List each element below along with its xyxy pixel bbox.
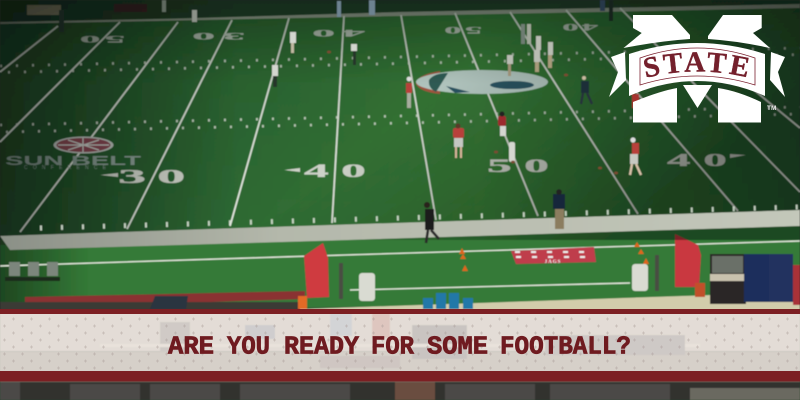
yard arrows bbox=[100, 154, 746, 177]
yard numbers, near side bbox=[118, 150, 740, 188]
red wall bbox=[25, 291, 305, 308]
banner bottom stripe bbox=[0, 371, 800, 382]
midfield eagle logo bbox=[416, 70, 548, 94]
banner headline bbox=[168, 332, 631, 362]
number 50: 50 bbox=[487, 156, 561, 177]
concrete walkway bbox=[300, 292, 800, 312]
Sun Belt logo bbox=[5, 136, 141, 171]
coach walking on sideline bbox=[424, 202, 439, 243]
lower field lines bbox=[0, 241, 800, 290]
Sun Belt logo: SUN BELT bbox=[5, 153, 141, 168]
ribbon body bbox=[629, 43, 765, 96]
equipment cases bbox=[695, 254, 800, 305]
top white sideline band bbox=[0, 4, 800, 24]
footballs bbox=[327, 51, 618, 174]
far field players bbox=[59, 0, 613, 87]
inverted yard numbers, far side: 50 bbox=[76, 34, 125, 44]
tick marks along sideline bbox=[40, 207, 800, 228]
top strip beyond sideline bbox=[0, 0, 800, 22]
official standing on sideline bbox=[553, 189, 565, 229]
banner headline: ARE bbox=[168, 332, 214, 362]
top banners bbox=[27, 4, 147, 15]
wide white sideline strip bbox=[0, 210, 800, 250]
coach dark bbox=[581, 76, 592, 104]
trademark: TM bbox=[767, 105, 776, 112]
yard lines bbox=[0, 8, 800, 232]
player on yard line bbox=[406, 77, 412, 108]
logo: Mississippi State M bbox=[609, 15, 785, 122]
banner headline: FOR bbox=[371, 332, 414, 362]
black table bbox=[150, 296, 188, 309]
red equipment cabinet left bbox=[304, 243, 329, 298]
stands bbox=[339, 255, 659, 299]
group in white bbox=[507, 24, 553, 76]
inverted yard numbers, far side: 50 bbox=[441, 25, 482, 35]
inverted yard numbers, far side bbox=[76, 22, 598, 44]
lower seats bbox=[0, 382, 800, 400]
inverted yard numbers, far side: 30 bbox=[185, 31, 245, 41]
M center point bbox=[683, 85, 712, 108]
jags sideline mat bbox=[511, 247, 596, 265]
banner headline: SOME bbox=[427, 332, 488, 362]
M lower right leg bbox=[718, 88, 761, 122]
stands below the banner bbox=[0, 310, 800, 400]
inverted yard numbers, far side: 40 bbox=[305, 28, 365, 38]
orange cones bbox=[459, 242, 649, 271]
banner top stripe bbox=[0, 309, 800, 314]
number 30: 30 bbox=[118, 166, 196, 188]
STATE wordmark: STATE bbox=[644, 52, 749, 78]
white barrels bbox=[359, 264, 648, 301]
hash marks bbox=[0, 48, 800, 132]
player near midfield bbox=[453, 124, 464, 158]
playing field turf bbox=[0, 0, 800, 240]
banner bbox=[0, 309, 800, 382]
orange cooler bbox=[298, 296, 307, 309]
ribbon maroon outline bbox=[640, 48, 755, 85]
banner cream panel bbox=[0, 314, 800, 371]
number 40: 40 bbox=[304, 161, 378, 182]
jags sideline mat: JAGS bbox=[545, 260, 561, 265]
players bbox=[59, 0, 641, 243]
player behind logo bbox=[632, 94, 639, 108]
Sun Belt logo: CONFERENCE bbox=[24, 165, 107, 171]
chairs bbox=[5, 262, 60, 281]
number 40 right: 40 bbox=[667, 150, 740, 170]
seats under banner bbox=[100, 310, 700, 368]
player right kicking bbox=[630, 137, 641, 175]
lower sideline turf bbox=[0, 222, 800, 312]
red equipment cabinet right bbox=[675, 234, 701, 287]
banner headline: FOOTBALL? bbox=[500, 332, 631, 362]
banner tails bbox=[609, 52, 626, 97]
banner headline: YOU bbox=[227, 332, 270, 362]
player kneeling bbox=[498, 112, 515, 162]
banner headline: READY bbox=[284, 332, 359, 362]
blue coolers bbox=[423, 293, 473, 309]
M upper strokes bbox=[624, 15, 690, 48]
M lower left leg bbox=[633, 88, 677, 122]
inverted yard numbers, far side: 40 bbox=[559, 22, 598, 32]
